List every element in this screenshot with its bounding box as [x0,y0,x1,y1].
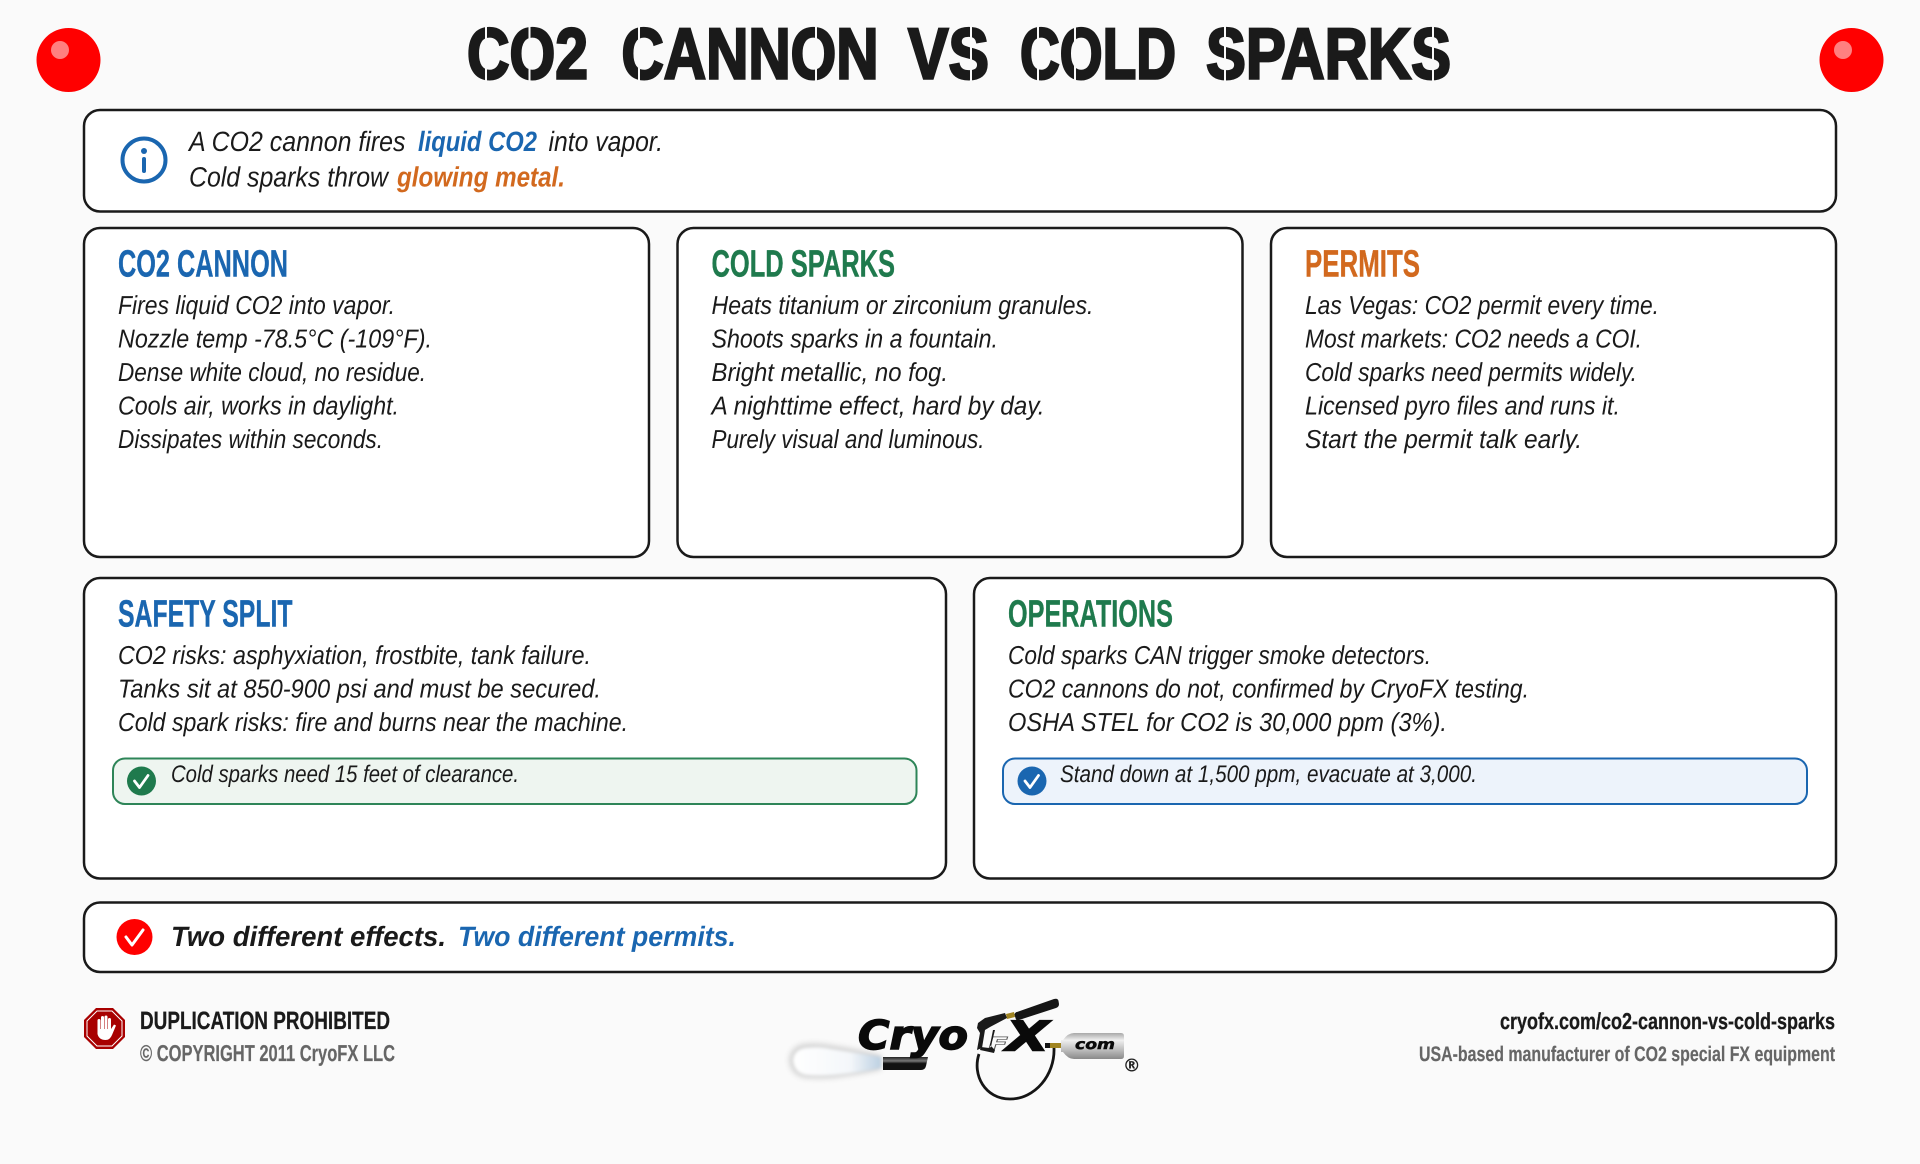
panel: permits [1271,228,1836,557]
copyright line: © COPYRIGHT 2011 CryoFX LLC [140,1040,395,1066]
heading: cold sparks: COLD SPARKS [712,244,895,286]
callout text: clearance: Cold sparks need 15 feet of clearance. [171,761,519,788]
body text: cold sparks: A nighttime effect, hard by day. [710,390,1044,420]
body text: safety split [118,640,628,737]
intro text line 1: liquid CO2 [418,126,537,157]
heading: safety split: SAFETY SPLIT [118,594,292,636]
panel: intro summary [84,110,1836,212]
body text: operations: Cold sparks CAN trigger smoke detectors. [1008,640,1431,670]
body text: CO2 cannon: Dense white cloud, no residue. [118,357,426,387]
body text: CO2 cannon: Cools air, works in daylight. [118,390,399,420]
callout: clearance [113,758,916,804]
title: SPARKS [1206,14,1451,94]
panel: safety split [84,578,946,878]
body text: operations: CO2 cannons do not, confirmed by CryoFX testing. [1008,674,1529,704]
callout text: stand down: Stand down at 1,500 ppm, evacuate at 3,000. [1060,761,1477,788]
wordmark: F: F [988,1034,1009,1055]
body text: permits: Start the permit talk early. [1305,424,1582,454]
tank label: com [1075,1037,1115,1053]
body text: CO2 cannon: Dissipates within seconds. [118,424,383,454]
body text: cold sparks: Heats titanium or zirconium granules. [712,290,1094,320]
footer: duplication notice [84,1007,395,1066]
hose [977,1048,1054,1099]
icon: blue check [1018,766,1046,796]
body text: permits: Licensed pyro files and runs it. [1305,390,1620,420]
body text: permits: Cold sparks need permits widely. [1305,357,1637,387]
body text: cold sparks: Purely visual and luminous. [712,424,984,454]
title: VS [908,14,989,94]
callout: stand down [1003,758,1807,804]
panel: cold sparks [678,228,1242,557]
wordmark: Cryo: Cryo [858,1013,968,1059]
source url: cryofx.com/co2-cannon-vs-cold-sparks [1500,1008,1835,1034]
body text: cold sparks: Shoots sparks in a fountain. [712,324,998,354]
title [467,14,1451,94]
panel: CO2 cannon [84,228,649,557]
title: COLD [1020,14,1176,94]
nozzle [883,1057,928,1070]
body text: cold sparks [710,290,1094,454]
body text: safety split: Cold spark risks: fire and burns near the machine. [118,707,628,737]
takeaway text: Two different permits. [458,921,736,952]
wordmark: X: X [1002,1012,1052,1060]
body text: operations [1008,640,1529,737]
heading: operations: OPERATIONS [1008,594,1173,636]
body text: operations: OSHA STEL for CO2 is 30,000 ppm (3%). [1008,707,1447,737]
heading: permits: PERMITS [1305,244,1420,286]
panel: takeaway bar [84,902,1836,972]
logo: CryoFX [789,999,1141,1099]
body text: safety split: CO2 risks: asphyxiation, frostbite, tank failure. [118,640,591,670]
takeaway text: Two different effects. [171,921,446,952]
panel: operations [974,578,1836,878]
indicator: left red dot [36,28,100,92]
body text: CO2 cannon: Fires liquid CO2 into vapor. [118,290,395,320]
body text: cold sparks: Bright metallic, no fog. [712,357,948,387]
body text: permits: Most markets: CO2 needs a COI. [1305,324,1642,354]
tank [1061,1033,1124,1059]
icon: stop hand [84,1008,125,1049]
body text: CO2 cannon [118,290,432,454]
intro text line 2: Cold sparks throw [189,162,390,192]
body text: CO2 cannon: Nozzle temp -78.5°C (-109°F). [118,324,432,354]
connector [1045,1043,1061,1048]
registered mark: ® [1123,1056,1141,1076]
body text: permits [1305,290,1659,454]
intro text line 1: into vapor. [548,126,663,157]
icon: gun [977,999,1059,1053]
title: CANNON [622,14,878,94]
intro text line 2: glowing metal. [396,162,565,192]
smoke plume [789,1043,881,1078]
indicator: right red dot [1820,28,1884,92]
body text: permits: Las Vegas: CO2 permit every time. [1305,290,1659,320]
footer: source [1419,1008,1835,1066]
icon: info [122,138,166,182]
icon: green check [127,766,156,796]
title: CO2 [467,14,588,94]
notice heading: DUPLICATION PROHIBITED [140,1007,390,1035]
takeaway text [171,921,736,952]
intro text line 2 [189,162,565,192]
icon: red check [116,919,152,955]
intro text line 1: A CO2 cannon fires [187,126,406,157]
body text: safety split: Tanks sit at 850-900 psi and must be secured. [118,674,601,704]
intro text line 1 [187,126,663,157]
heading: CO2 cannon: CO2 CANNON [118,244,288,286]
